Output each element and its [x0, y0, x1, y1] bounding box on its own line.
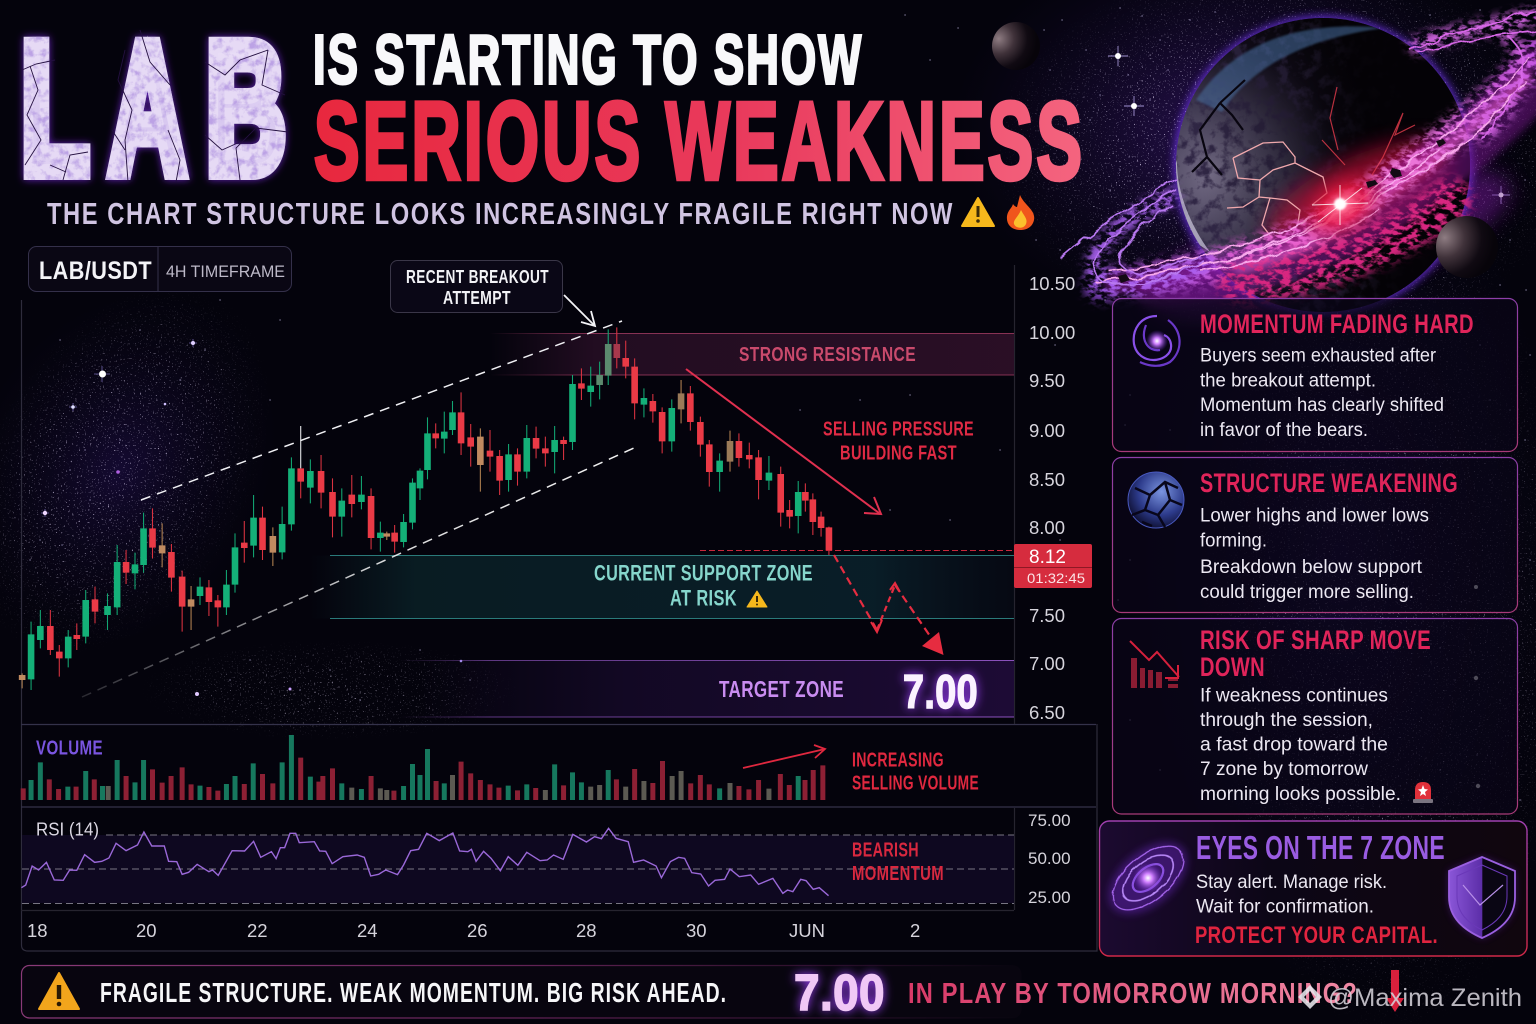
RSI chart [21, 820, 1014, 904]
panel text: forming. [1200, 530, 1267, 552]
panel: risk of sharp move down: RISK OF SHARP MOVE [1200, 625, 1431, 655]
title: serious weakness: SERIOUS WEAKNESS [314, 80, 1085, 203]
price axis: 7.00 [1029, 653, 1065, 674]
panel text: Momentum has clearly shifted [1200, 395, 1444, 416]
panel: risk of sharp move down: DOWN [1200, 652, 1265, 682]
label: selling pressure: BUILDING FAST [840, 442, 957, 465]
title: is starting to show: IS STARTING TO SHOW [313, 20, 863, 98]
arrow: selling pressure [686, 369, 881, 514]
panel: risk of sharp move down [1112, 618, 1518, 814]
arrow: projected drop [834, 555, 944, 655]
illustration: small moon [992, 22, 1040, 70]
panel text: 7 zone by tomorrow [1200, 759, 1368, 780]
zone: support: AT RISK [670, 586, 737, 610]
time axis: 2 [910, 920, 920, 941]
RSI axis [1028, 811, 1071, 907]
candlesticks [22, 327, 829, 690]
price axis: 9.50 [1029, 370, 1065, 391]
RSI axis: 25.00 [1028, 888, 1071, 907]
label: increasing selling volume: SELLING VOLUME [852, 773, 979, 795]
panel: eyes on the 7 zone [1095, 821, 1527, 956]
icon: flame [1007, 195, 1034, 230]
current price line [700, 550, 1014, 552]
price axis: 6.50 [1029, 702, 1065, 723]
panel text: could trigger more selling. [1200, 582, 1414, 603]
illustration: cracking planet with ring [1060, 10, 1536, 351]
label: bearish momentum [852, 840, 944, 885]
icon: warning [39, 973, 79, 1009]
label: selling pressure: SELLING PRESSURE [823, 418, 974, 441]
zone: target [400, 660, 1014, 718]
zone: strong resistance: STRONG RESISTANCE [739, 343, 916, 366]
zone: support: CURRENT SUPPORT ZONE [594, 560, 813, 586]
price axis: 8.00 [1029, 517, 1065, 538]
ticker chip [28, 246, 292, 292]
icon: spiral [1134, 316, 1180, 366]
panel: eyes on the 7 zone: PROTECT YOUR CAPITAL. [1195, 922, 1438, 949]
price axis [1029, 273, 1075, 723]
channel lines [82, 321, 634, 697]
title: LAB: L [21, 6, 89, 212]
zone: target: TARGET ZONE [719, 676, 844, 702]
RSI axis: 50.00 [1028, 849, 1071, 868]
panel text: Stay alert. Manage risk. [1196, 872, 1387, 893]
title: LAB: B [206, 6, 286, 212]
time axis [27, 920, 920, 941]
icon: shield [1449, 857, 1515, 938]
time axis: JUN [789, 920, 825, 941]
panel text [1200, 686, 1401, 805]
callout: recent breakout attempt [390, 260, 562, 312]
panel text: Breakdown below support [1200, 557, 1423, 578]
panel text [1200, 346, 1444, 441]
panel text: the breakout attempt. [1200, 370, 1376, 392]
panel text [1200, 506, 1429, 603]
price tag: 01:32:45 [1027, 571, 1085, 586]
panel text: through the session, [1200, 710, 1373, 731]
bottom banner: IN PLAY BY TOMORROW MORNING? [908, 978, 1358, 1010]
panel text [1196, 872, 1387, 918]
title: LAB: A [109, 6, 186, 212]
price axis: 8.50 [1029, 469, 1065, 490]
panel text: If weakness continues [1200, 686, 1388, 706]
arrow: to breakout peak [564, 295, 595, 326]
zone: support [310, 556, 1014, 618]
time axis: 24 [357, 920, 378, 941]
label: bearish momentum: BEARISH [852, 840, 919, 862]
ticker chip: LAB/USDT [39, 257, 152, 285]
price axis: 7.50 [1029, 605, 1065, 626]
price axis: 10.50 [1029, 273, 1075, 294]
callout: recent breakout attempt: RECENT BREAKOUT [406, 267, 549, 287]
label: increasing selling volume: INCREASING [852, 750, 944, 772]
panel text: morning looks possible. [1200, 784, 1401, 805]
icon: siren [1413, 782, 1433, 803]
time axis: 22 [247, 920, 268, 941]
title: LAB [21, 6, 288, 212]
arrow: rising volume [743, 745, 825, 768]
icon: falling chart [1130, 641, 1179, 688]
panel text: in favor of the bears. [1200, 420, 1368, 441]
icon: cracked planet [1128, 472, 1184, 528]
panel text: Wait for confirmation. [1196, 896, 1374, 918]
chart panel [21, 246, 1097, 951]
RSI axis: 75.00 [1028, 811, 1071, 830]
zone: target: 7.00 [903, 665, 978, 718]
stars: top right sky [1108, 46, 1510, 788]
zone: strong resistance [490, 333, 1014, 375]
panel text: Buyers seem exhausted after [1200, 346, 1437, 366]
bottom banner: FRAGILE STRUCTURE. WEAK MOMENTUM. BIG RISK AHEAD. [100, 977, 727, 1008]
watermark: @Maxima Zenith [1328, 984, 1522, 1012]
price axis: 9.00 [1029, 420, 1065, 441]
time axis: 26 [467, 920, 488, 941]
time axis: 18 [27, 920, 48, 941]
label: volume: VOLUME [36, 738, 103, 760]
label: bearish momentum: MOMENTUM [852, 863, 944, 885]
subtitle: THE CHART STRUCTURE LOOKS INCREASINGLY FRAGILE RIGHT NOW [47, 197, 954, 231]
label: selling pressure [823, 418, 974, 465]
callout: recent breakout attempt: ATTEMPT [443, 288, 511, 308]
bottom banner: 7.00 [794, 964, 885, 1021]
volume chart [23, 735, 823, 800]
time axis: 30 [686, 920, 707, 941]
label: increasing selling volume [852, 750, 979, 795]
icon: galaxy [1095, 828, 1201, 928]
ticker chip: 4H TIMEFRAME [166, 262, 285, 281]
nebula: chart background stars [41, 339, 462, 696]
time axis: 20 [136, 920, 157, 941]
RSI chart: RSI (14) [36, 820, 99, 840]
icon: warning [962, 198, 994, 226]
panel: momentum fading hard [1112, 298, 1518, 452]
panel text: a fast drop toward the [1200, 734, 1388, 756]
bottom banner [22, 964, 1404, 1021]
price tag: 8.12 [1029, 547, 1066, 568]
price tag [1014, 544, 1092, 588]
panel: structure weakening [1112, 458, 1518, 612]
icon: warning [747, 591, 767, 607]
icon: down arrow [1386, 970, 1404, 1012]
time axis: 28 [576, 920, 597, 941]
panel text: Lower highs and lower lows [1200, 506, 1429, 526]
price axis: 10.00 [1029, 322, 1075, 343]
